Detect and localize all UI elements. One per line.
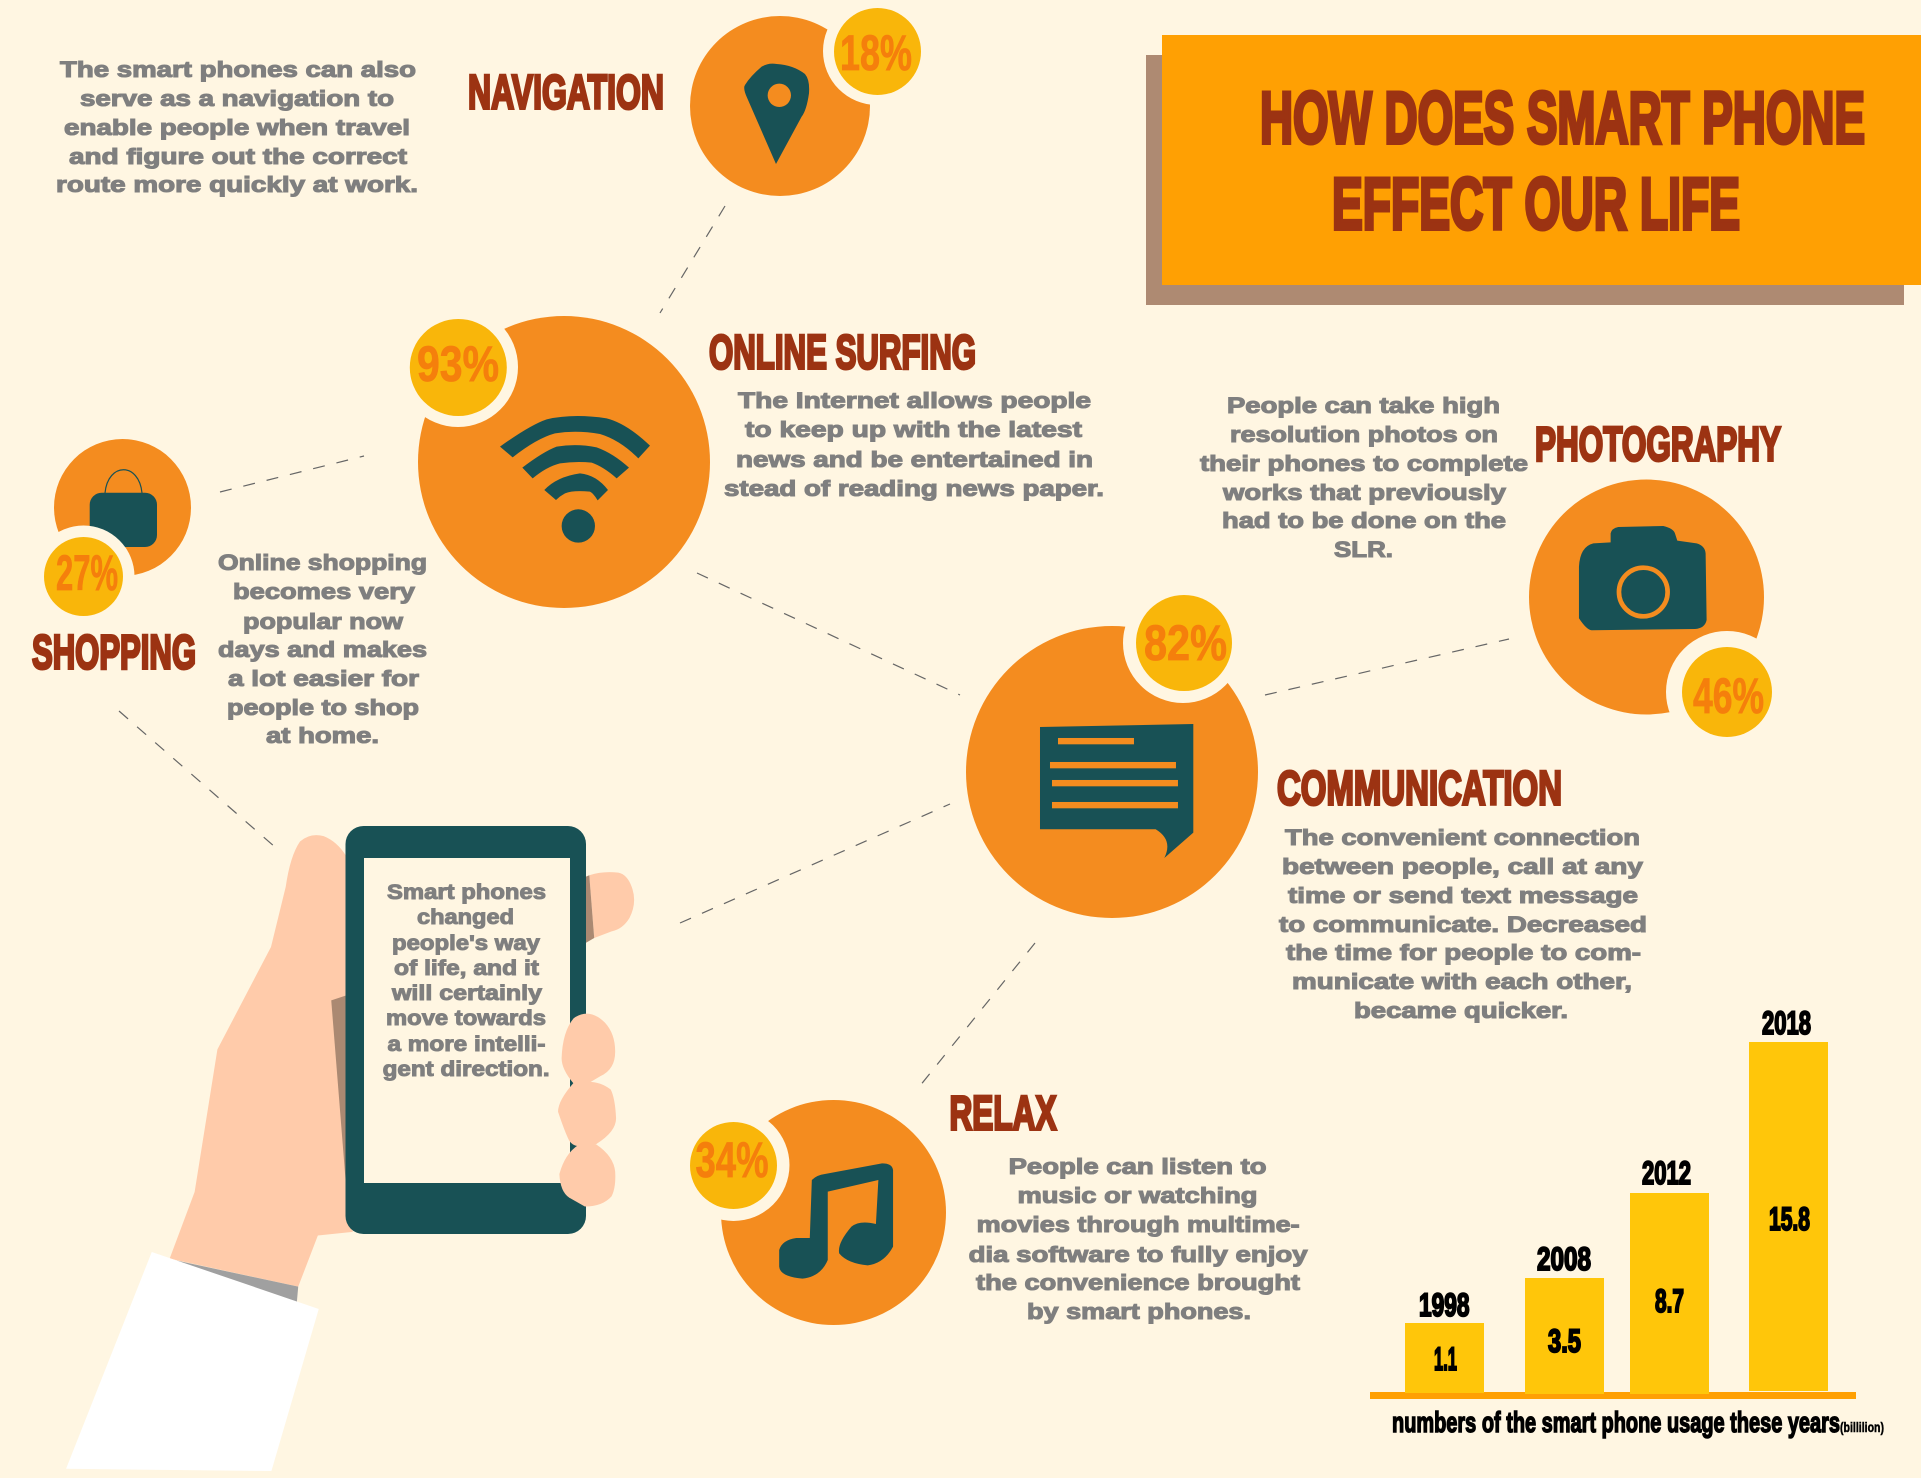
- phone body: [346, 826, 586, 1234]
- shopping circle: [54, 439, 191, 576]
- phone screen text: [383, 881, 550, 1081]
- panel: photography: [1200, 393, 1788, 753]
- bar 2012: [1630, 1155, 1709, 1394]
- online surfing body text: stead of reading news paper.: [724, 476, 1104, 501]
- bar 2012: 2012: [1642, 1155, 1691, 1191]
- badge: 18%: 18%: [840, 25, 912, 81]
- phone screen text: people's way: [392, 932, 540, 955]
- bar 2018: 15.8: [1769, 1201, 1810, 1237]
- relax circle: [721, 1100, 946, 1325]
- panel: communication: [966, 583, 1647, 1023]
- navigation heading: NAVIGATION: [468, 66, 664, 120]
- panel: navigation: [56, 0, 931, 197]
- icon: camera: [1579, 526, 1707, 630]
- navigation body text: route more quickly at work.: [56, 172, 418, 197]
- communication body text: time or send text message: [1288, 883, 1638, 908]
- communication circle: [966, 626, 1258, 918]
- navigation circle: [690, 16, 870, 196]
- bar 2012: 8.7: [1655, 1283, 1684, 1319]
- online surfing body text: to keep up with the latest: [745, 417, 1083, 442]
- relax body text: music or watching: [1018, 1183, 1258, 1208]
- badge: 34%: [678, 1109, 790, 1221]
- communication body text: to communicate. Decreased: [1279, 912, 1647, 937]
- badge: 93%: 93%: [417, 336, 499, 392]
- badge: 34%: 34%: [696, 1132, 768, 1188]
- relax body text: the convenience brought: [976, 1270, 1301, 1295]
- badge: 27%: [32, 526, 134, 628]
- communication body text: municate with each other,: [1292, 969, 1632, 994]
- badge: 46%: 46%: [1693, 668, 1764, 724]
- online surfing body text: The Internet allows people: [738, 388, 1091, 413]
- photography body text: their phones to complete: [1200, 451, 1528, 476]
- communication body text: The convenient connection: [1285, 825, 1640, 850]
- shopping body text: a lot easier for: [228, 666, 419, 691]
- title: [1260, 78, 1865, 245]
- navigation body text: [56, 57, 418, 197]
- bar 1998: 1.1: [1434, 1341, 1457, 1377]
- fingers: [558, 1014, 616, 1207]
- title banner: [1146, 35, 1921, 305]
- navigation body text: enable people when travel: [64, 115, 410, 140]
- illustration: hand holding phone: [66, 826, 634, 1471]
- badge: 27%: 27%: [56, 545, 118, 601]
- relax body text: [969, 1154, 1308, 1324]
- bar 2008: 3.5: [1548, 1323, 1581, 1359]
- online surfing heading: ONLINE SURFING: [709, 326, 976, 380]
- shopping body text: Online shopping: [218, 550, 427, 575]
- online surfing body text: news and be entertained in: [736, 447, 1093, 472]
- chart baseline: [1370, 1392, 1856, 1399]
- communication heading: COMMUNICATION: [1277, 762, 1562, 816]
- badge: 82%: [1123, 583, 1243, 703]
- badge: 46%: [1666, 631, 1788, 753]
- shopping body text: at home.: [266, 723, 379, 748]
- panel: relax: [678, 1088, 1308, 1325]
- bar chart: smart phone usage: [1370, 1005, 1884, 1439]
- photography body text: People can take high: [1227, 393, 1500, 418]
- bar 1998: [1405, 1287, 1484, 1393]
- shopping body text: becomes very: [233, 579, 416, 604]
- shopping body text: [218, 550, 427, 748]
- photography circle: [1529, 480, 1764, 714]
- phone screen text: of life, and it: [394, 957, 539, 980]
- photography body text: resolution photos on: [1230, 422, 1498, 447]
- icon: shopping bag: [90, 470, 157, 547]
- badge: 93%: [398, 307, 518, 427]
- photography body text: works that previously: [1222, 480, 1507, 505]
- chart caption: (billilion): [1840, 1419, 1884, 1435]
- shopping body text: days and makes: [218, 637, 427, 662]
- panel: shopping: [32, 439, 427, 748]
- relax body text: People can listen to: [1009, 1154, 1267, 1179]
- navigation body text: The smart phones can also: [60, 57, 416, 82]
- phone screen: [364, 858, 570, 1183]
- phone screen text: gent direction.: [383, 1058, 550, 1081]
- bar 1998: 1998: [1419, 1287, 1470, 1323]
- bar 2018: [1749, 1005, 1828, 1391]
- phone screen text: will certainly: [391, 982, 542, 1005]
- communication body text: between people, call at any: [1282, 854, 1644, 879]
- bar 2008: 2008: [1537, 1241, 1591, 1277]
- relax body text: movies through multime-: [977, 1212, 1300, 1237]
- phone screen text: changed: [417, 906, 514, 929]
- bar 2018: 2018: [1762, 1005, 1811, 1041]
- shopping body text: people to shop: [227, 695, 419, 720]
- hand and sleeve art: [66, 835, 634, 1471]
- icon: map pin: [744, 64, 809, 164]
- bar 2008: [1525, 1241, 1604, 1394]
- icon: chat bubble: [1040, 724, 1193, 858]
- badge: 82%: 82%: [1144, 615, 1227, 671]
- online surfing circle: [418, 316, 710, 608]
- navigation body text: serve as a navigation to: [80, 86, 394, 111]
- online surfing body text: [724, 388, 1104, 501]
- communication body text: became quicker.: [1354, 998, 1568, 1023]
- icon: wifi: [500, 416, 650, 543]
- badge: 18%: [823, 0, 931, 105]
- phone screen text: move towards: [386, 1007, 546, 1030]
- relax body text: by smart phones.: [1027, 1299, 1251, 1324]
- phone screen text: Smart phones: [387, 881, 546, 904]
- communication body text: [1279, 825, 1647, 1023]
- phone screen text: a more intelli-: [388, 1033, 546, 1056]
- shopping body text: popular now: [243, 609, 404, 634]
- panel: online surfing: [398, 307, 1104, 608]
- photography body text: SLR.: [1334, 537, 1393, 562]
- photography heading: PHOTOGRAPHY: [1535, 418, 1781, 472]
- shopping heading: SHOPPING: [32, 626, 196, 680]
- relax body text: dia software to fully enjoy: [969, 1242, 1308, 1267]
- communication body text: the time for people to com-: [1286, 940, 1641, 965]
- relax heading: RELAX: [950, 1088, 1056, 1140]
- navigation body text: and figure out the correct: [69, 144, 408, 169]
- photography body text: had to be done on the: [1222, 508, 1506, 533]
- icon: music note: [779, 1163, 893, 1279]
- photography body text: [1200, 393, 1528, 562]
